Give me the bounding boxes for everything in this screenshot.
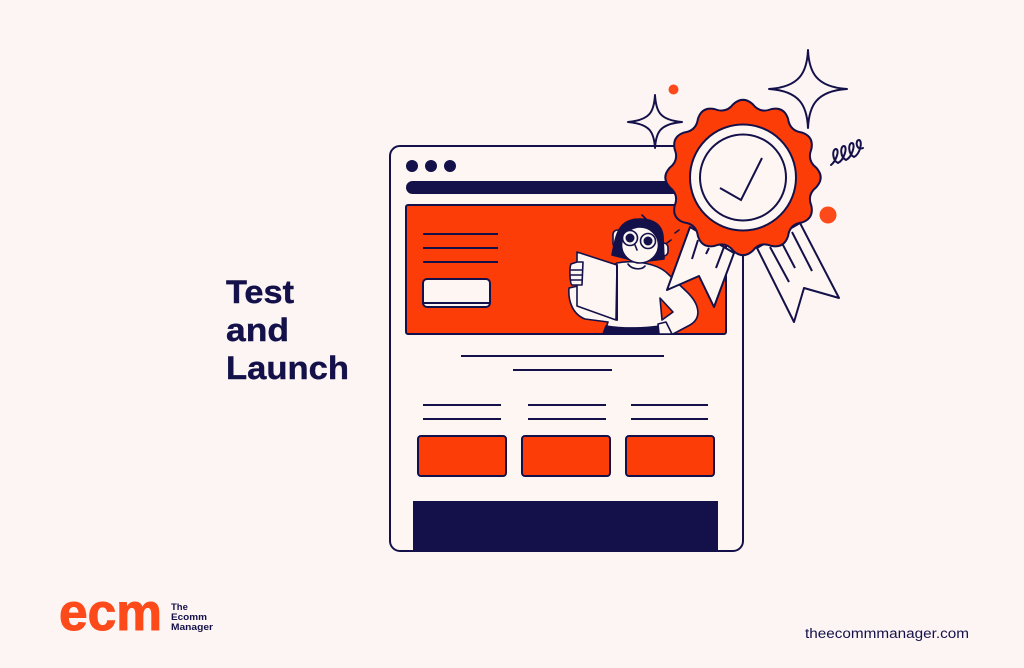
nose xyxy=(635,245,637,250)
face xyxy=(622,227,658,263)
neck xyxy=(628,264,645,269)
hair xyxy=(612,219,664,262)
scalloped seal xyxy=(665,100,821,255)
large orange dot xyxy=(820,206,836,224)
hero banner xyxy=(406,205,726,334)
trousers xyxy=(603,326,664,334)
raised hand xyxy=(570,262,583,285)
title: Test and Launch: Test xyxy=(226,274,294,310)
column text lines xyxy=(423,405,708,419)
waist gap xyxy=(660,298,673,320)
title: Test and Launch xyxy=(226,274,349,386)
window control dots xyxy=(406,160,456,172)
headset ears xyxy=(613,230,622,248)
award badge with ribbons xyxy=(665,100,839,322)
large sparkle star xyxy=(769,50,847,128)
hero button xyxy=(423,279,490,307)
orange call-to-action buttons xyxy=(418,436,714,476)
small orange dot xyxy=(668,84,678,94)
logo wordmark: ecm xyxy=(59,584,162,642)
browser frame xyxy=(390,146,743,551)
browser window mockup xyxy=(390,146,743,551)
seal outer circle xyxy=(690,124,796,230)
heading lines xyxy=(461,356,664,370)
glasses xyxy=(622,230,656,248)
check mark xyxy=(720,158,762,200)
logo tagline: Manager xyxy=(171,622,213,633)
left ribbon xyxy=(667,227,734,307)
hero text lines xyxy=(423,234,498,262)
logo tagline: Ecomm xyxy=(171,612,207,623)
title: Test and Launch: and xyxy=(226,312,289,348)
thought marks xyxy=(642,215,679,243)
website address: theecommmanager.com xyxy=(805,626,969,641)
squiggle xyxy=(831,140,863,165)
small sparkle star xyxy=(628,95,682,148)
logo: ecm The Ecomm Manager xyxy=(59,584,213,642)
body and arms xyxy=(569,262,698,334)
logo tagline: The xyxy=(171,602,188,613)
right ribbon xyxy=(757,223,839,322)
hand on hip xyxy=(658,322,672,334)
title: Test and Launch: Launch xyxy=(226,350,349,386)
open document xyxy=(577,252,617,320)
address bar xyxy=(406,181,696,194)
logo tagline xyxy=(171,602,213,633)
dark footer block xyxy=(413,501,718,551)
person reading a document xyxy=(569,215,698,334)
seal inner ring xyxy=(700,134,786,220)
